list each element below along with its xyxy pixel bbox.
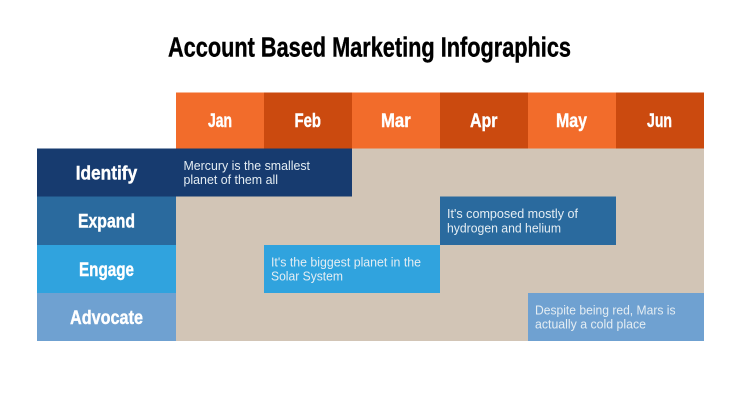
month: Mar: Mar <box>381 110 411 132</box>
row label: Engage <box>37 245 176 293</box>
bar: Jan to Feb <box>176 148 352 196</box>
chart background <box>176 148 704 341</box>
bar: May to Jun <box>528 293 704 341</box>
bar: Feb to Mar <box>264 245 440 293</box>
month: May: May <box>556 110 587 132</box>
row label: Advocate <box>37 293 176 341</box>
row: Advocate <box>37 293 704 341</box>
row: Expand <box>37 196 616 245</box>
row: Identify <box>37 148 352 196</box>
bar: Apr to May <box>440 196 616 245</box>
row label: Advocate: Advocate <box>70 307 143 329</box>
row label: Expand: Expand <box>78 210 135 232</box>
month: Jun <box>616 92 704 148</box>
panel: timeline chart <box>37 92 704 341</box>
bar: Feb to Mar: Solar System <box>271 270 343 284</box>
bar: May to Jun: Despite being red, Mars is <box>535 304 676 318</box>
title: Account Based Marketing Infographics <box>168 32 571 62</box>
month: Feb: Feb <box>294 110 321 132</box>
bar: Jan to Feb: Mercury is the smallest <box>184 159 310 173</box>
month: Apr <box>440 92 528 148</box>
month: Jan <box>176 92 264 148</box>
month: Feb <box>264 92 352 148</box>
month: Apr: Apr <box>470 110 498 132</box>
bar: Jan to Feb: planet of them all <box>184 173 278 187</box>
bar: May to Jun: actually a cold place <box>535 318 646 332</box>
month header row <box>176 92 704 148</box>
bar: Apr to May: It's composed mostly of <box>447 207 578 221</box>
bar: Apr to May: hydrogen and helium <box>447 222 561 236</box>
row label: Identify: Identify <box>76 162 137 184</box>
month: May <box>528 92 616 148</box>
bar: Feb to Mar: It's the biggest planet in the <box>271 256 421 270</box>
row label: Engage: Engage <box>79 259 134 281</box>
row: Engage <box>37 245 440 293</box>
month: Mar <box>352 92 440 148</box>
month: Jun: Jun <box>647 110 672 132</box>
month: Jan: Jan <box>208 110 232 132</box>
row label: Identify <box>37 148 176 196</box>
row label: Expand <box>37 196 176 245</box>
